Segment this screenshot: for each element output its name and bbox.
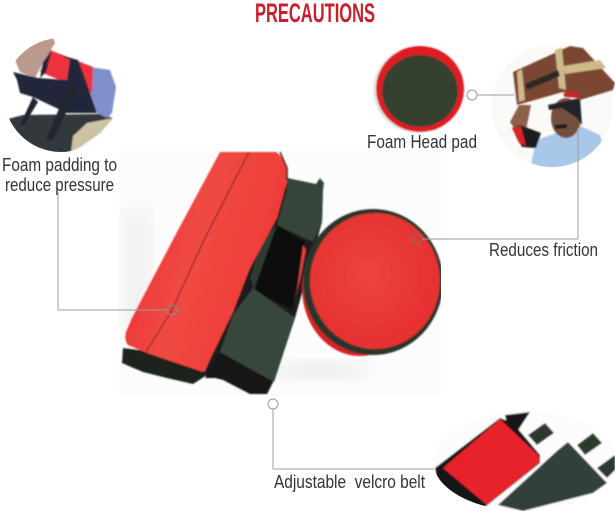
icon: shoulder skin bbox=[15, 37, 55, 78]
icon: blue shirt bbox=[90, 67, 116, 118]
icon: round foam pad bbox=[302, 209, 443, 356]
icon: head bbox=[551, 98, 581, 138]
panel: left circle photo of padded shoulder bbox=[4, 37, 116, 156]
icon: raised arm bbox=[510, 105, 531, 130]
label: foam padding bbox=[2, 155, 117, 195]
label: foam head pad: Foam Head pad bbox=[367, 132, 477, 152]
icon: dark green pad bbox=[498, 442, 607, 511]
panel: velcro belt photo bbox=[430, 408, 615, 511]
icon: lower velcro strap bbox=[220, 288, 295, 382]
label: adjustable velcro belt: Adjustable velcro belt bbox=[274, 472, 425, 492]
panel: main product photo bbox=[119, 151, 443, 396]
icon: red arm pad bbox=[125, 152, 287, 372]
icon: black inner lining bbox=[255, 226, 304, 309]
icon: top velcro strap bbox=[277, 178, 324, 242]
icon: dark backing of the pad bbox=[203, 178, 323, 394]
icon: red and black arm guard bbox=[512, 125, 541, 148]
icon: dark straps bbox=[13, 55, 97, 113]
label: foam padding: Foam padding to bbox=[2, 155, 117, 175]
icon: black underside of the pad bbox=[204, 374, 274, 394]
label: foam padding: reduce pressure bbox=[5, 175, 114, 195]
icon: red pad with black binding bbox=[435, 418, 540, 507]
icon: seat bbox=[8, 113, 113, 152]
icon: velcro straps bbox=[505, 412, 530, 432]
icon: suitcase bbox=[513, 46, 615, 105]
icon: red shoulder pad bbox=[40, 50, 93, 93]
label: reduces friction: Reduces friction bbox=[489, 240, 598, 260]
connector lines bbox=[58, 90, 578, 469]
icon: black binding of the arm pad bbox=[122, 348, 207, 384]
icon: shirt bbox=[530, 125, 602, 167]
panel: man carrying suitcase photo bbox=[508, 45, 615, 167]
panel: foam head pad photo bbox=[373, 46, 464, 133]
